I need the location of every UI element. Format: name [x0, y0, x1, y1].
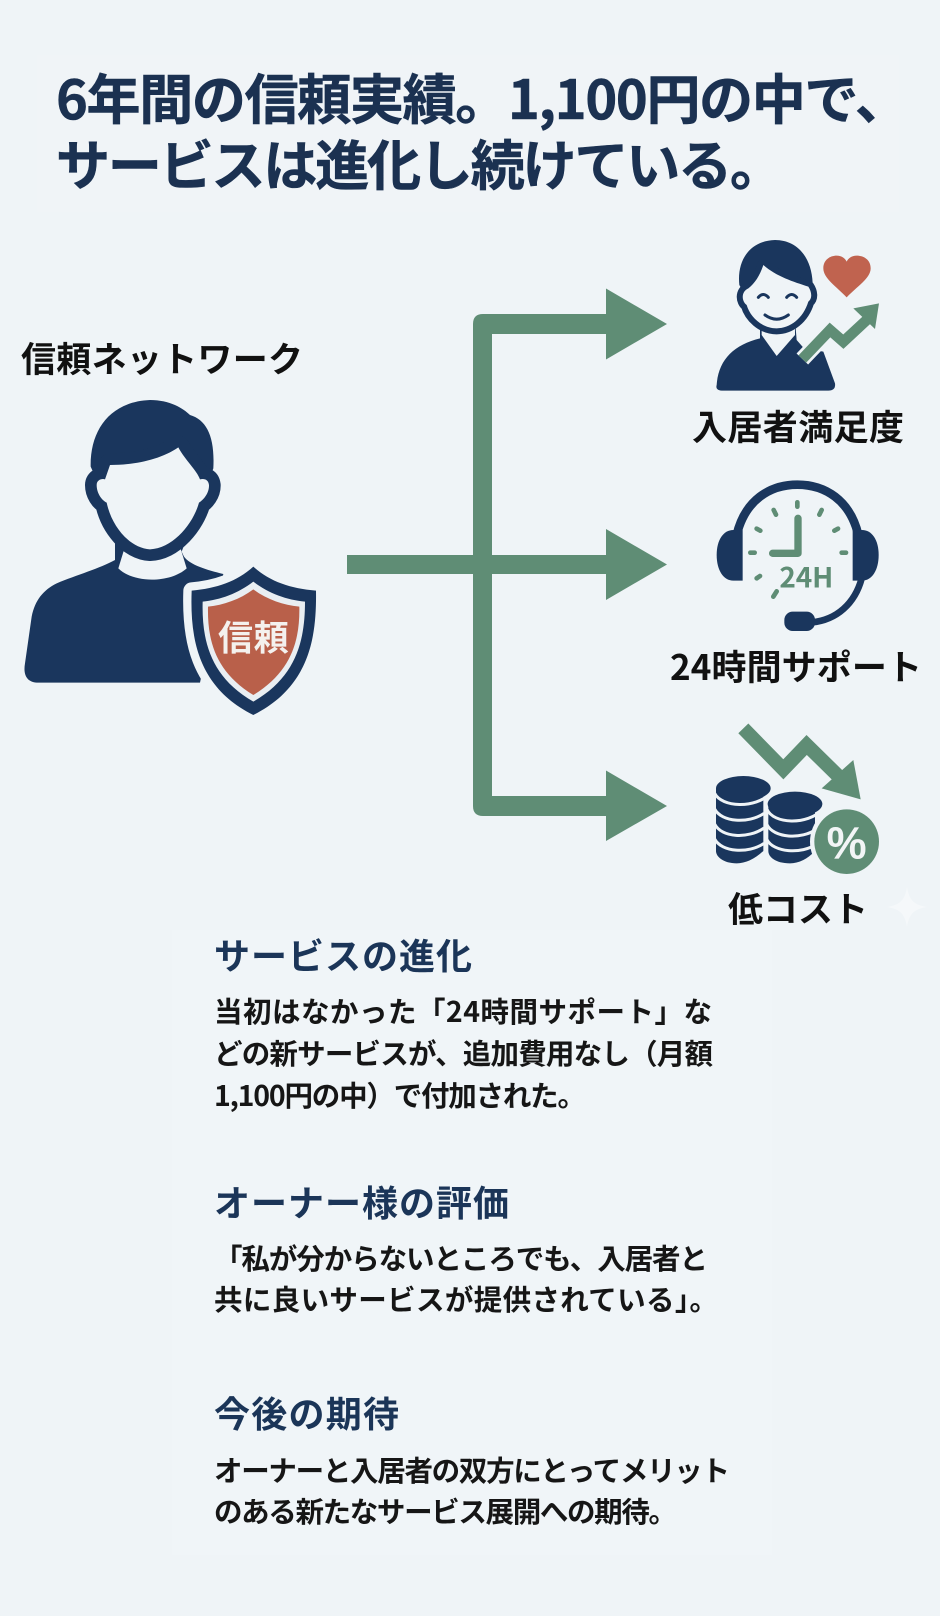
- text block: owner evaluation: [214, 1175, 718, 1319]
- title: サービスは進化し続けている。: [56, 122, 784, 201]
- body: future expectations: [214, 1449, 730, 1531]
- icon: coins with falling arrow and percent badge: %: [827, 817, 867, 868]
- body: owner evaluation: 「私が分からないところでも、入居者と: [214, 1237, 708, 1278]
- panel: resident satisfaction: [692, 240, 904, 451]
- body: service evolution: 当初はなかった「24時間サポート」な: [214, 990, 712, 1031]
- heading: future expectations: 今後の期待: [214, 1386, 399, 1438]
- label: low cost: 低コスト: [728, 882, 868, 933]
- panel: low cost: [715, 728, 883, 933]
- body: future expectations: オーナーと入居者の双方にとってメリット: [214, 1449, 730, 1490]
- icon: coins with falling arrow and percent badge: [715, 728, 883, 878]
- body: future expectations: のある新たなサービス展開への期待。: [214, 1490, 677, 1531]
- title: [56, 56, 909, 201]
- icon: headset with clock: [717, 485, 879, 631]
- heading: trust network: 信頼ネットワーク: [21, 332, 303, 383]
- body: owner evaluation: 共に良いサービスが提供されている」。: [214, 1278, 718, 1319]
- body: service evolution: 1,100円の中）で付加された。: [214, 1074, 586, 1115]
- text block: service evolution: [214, 928, 713, 1115]
- body: owner evaluation: [214, 1237, 718, 1319]
- arrows: branching connector: [347, 288, 667, 841]
- body: service evolution: [214, 990, 713, 1115]
- text block: future expectations: [214, 1386, 730, 1531]
- panel: trust network: [21, 332, 316, 715]
- title: 6年間の信頼実績。1,100円の中で、: [56, 56, 909, 135]
- label: 24 hour support: 24時間サポート: [670, 640, 922, 691]
- icon: person with trust shield: 信頼: [218, 611, 289, 662]
- icon: smiling resident with heart and rising arrow: [716, 240, 879, 391]
- body: service evolution: どの新サービスが、追加費用なし（月額: [214, 1032, 713, 1073]
- heading: service evolution: サービスの進化: [214, 928, 472, 980]
- icon: headset with clock: 24H: [779, 556, 833, 596]
- heading: owner evaluation: オーナー様の評価: [214, 1175, 509, 1227]
- label: resident satisfaction: 入居者満足度: [692, 400, 904, 451]
- panel: 24 hour support: [670, 485, 922, 691]
- icon: person with trust shield: [24, 400, 316, 715]
